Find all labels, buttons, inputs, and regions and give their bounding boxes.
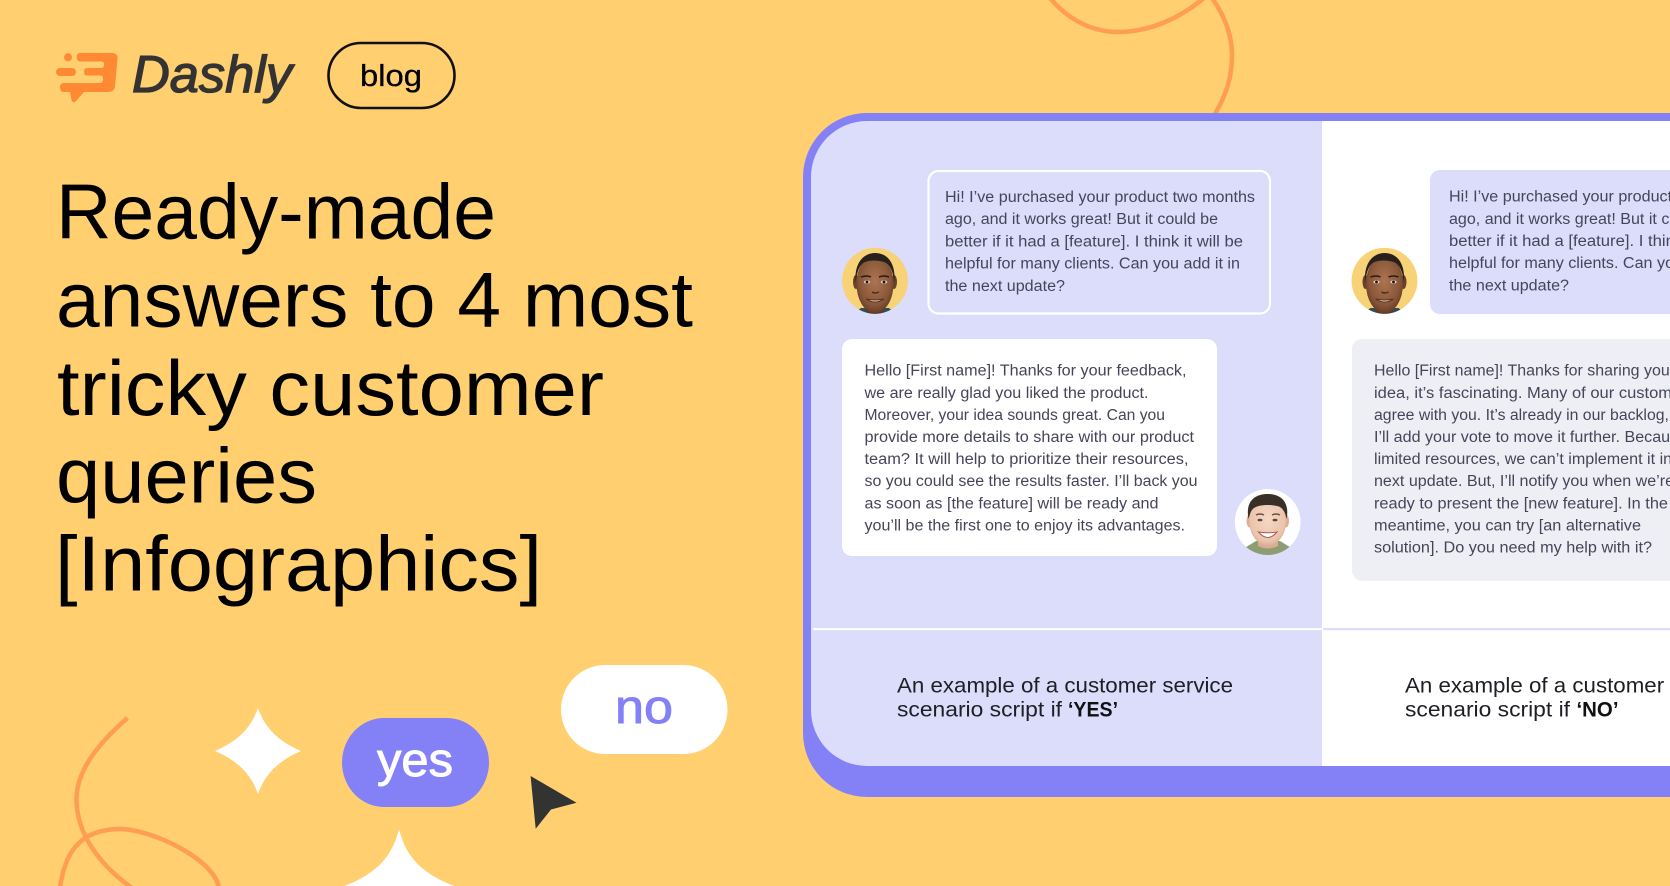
decorative orange curves bottom left [60, 718, 219, 886]
customer message yes column: the next update? [945, 278, 1065, 295]
agent reply yes column: provide more details to share with our product [864, 429, 1195, 446]
panel: chat script card [803, 113, 1670, 797]
column: yes background [811, 121, 1322, 766]
icon: cursor arrow [531, 776, 576, 829]
title [55, 168, 693, 608]
card frame [803, 113, 1670, 797]
no pill [561, 665, 728, 754]
agent reply no column [1352, 339, 1670, 581]
agent reply yes column: as soon as [the feature] will be ready and [864, 495, 1158, 512]
wordmark: Dashly [132, 46, 295, 104]
customer message no column [1430, 170, 1670, 314]
agent reply no column: Hello [First name]! Thanks for sharing your [1374, 363, 1670, 380]
agent reply no column: next update. But, I’ll notify you when we’re [1374, 473, 1670, 490]
caption yes: An example of a customer service [897, 674, 1233, 698]
caption no [1405, 674, 1670, 722]
no pill: no [615, 680, 673, 733]
agent reply yes column: Moreover, your idea sounds great. Can you [864, 407, 1165, 424]
customer avatar yes column [842, 248, 908, 314]
yes pill: yes [377, 733, 453, 786]
caption yes: ‘YES’ [1068, 698, 1118, 722]
customer message yes column: better if it had a [feature]. I think it will be [945, 233, 1243, 250]
blog pill: blog [360, 58, 422, 93]
customer message yes column: ago, and it works great! But it could be [945, 211, 1218, 228]
agent reply yes column: so you could see the results faster. I’ll back you [864, 473, 1198, 490]
agent reply no column: solution]. Do you need my help with it? [1374, 540, 1652, 556]
title: queries [56, 432, 317, 520]
agent reply yes column [842, 339, 1217, 556]
title: [Infographics] [55, 520, 542, 608]
yes pill [342, 718, 489, 807]
agent reply no column: idea, it’s fascinating. Many of our customers [1374, 385, 1670, 402]
caption yes [897, 674, 1233, 722]
icon: speech bubble logo mark [56, 53, 118, 102]
customer avatar no column [1352, 248, 1418, 314]
decorative orange curves top [1050, 0, 1232, 114]
column: no background [1322, 121, 1670, 766]
agent reply yes column: Hello [First name]! Thanks for your feedback, [864, 363, 1186, 380]
blog pill [328, 43, 454, 108]
icon: white sparkle star cropped [342, 829, 457, 886]
agent reply yes column: team? It will help to prioritize their resources, [864, 451, 1188, 468]
logo: Dashly [56, 46, 295, 104]
agent reply no column: ready to present the [new feature]. In the [1374, 495, 1668, 512]
title: tricky customer [57, 344, 604, 432]
customer message yes column: Hi! I’ve purchased your product two months [945, 189, 1255, 206]
agent reply yes column: you’ll be the first one to enjoy its advantages. [864, 517, 1185, 534]
customer message yes column: helpful for many clients. Can you add it in [945, 256, 1240, 273]
icon: white sparkle star [215, 708, 301, 794]
agent avatar [1235, 489, 1301, 560]
caption no: scenario script if [1405, 698, 1570, 722]
title: answers to 4 most [56, 256, 693, 344]
caption yes: scenario script if [897, 698, 1062, 722]
customer message no column: the next update? [1449, 277, 1569, 294]
customer message yes column [928, 171, 1270, 314]
caption no: ‘NO’ [1576, 698, 1618, 722]
agent reply yes column: we are really glad you liked the product. [863, 385, 1148, 402]
agent reply no column: meantime, you can try [an alternative [1374, 517, 1641, 534]
title: Ready-made [56, 168, 496, 256]
